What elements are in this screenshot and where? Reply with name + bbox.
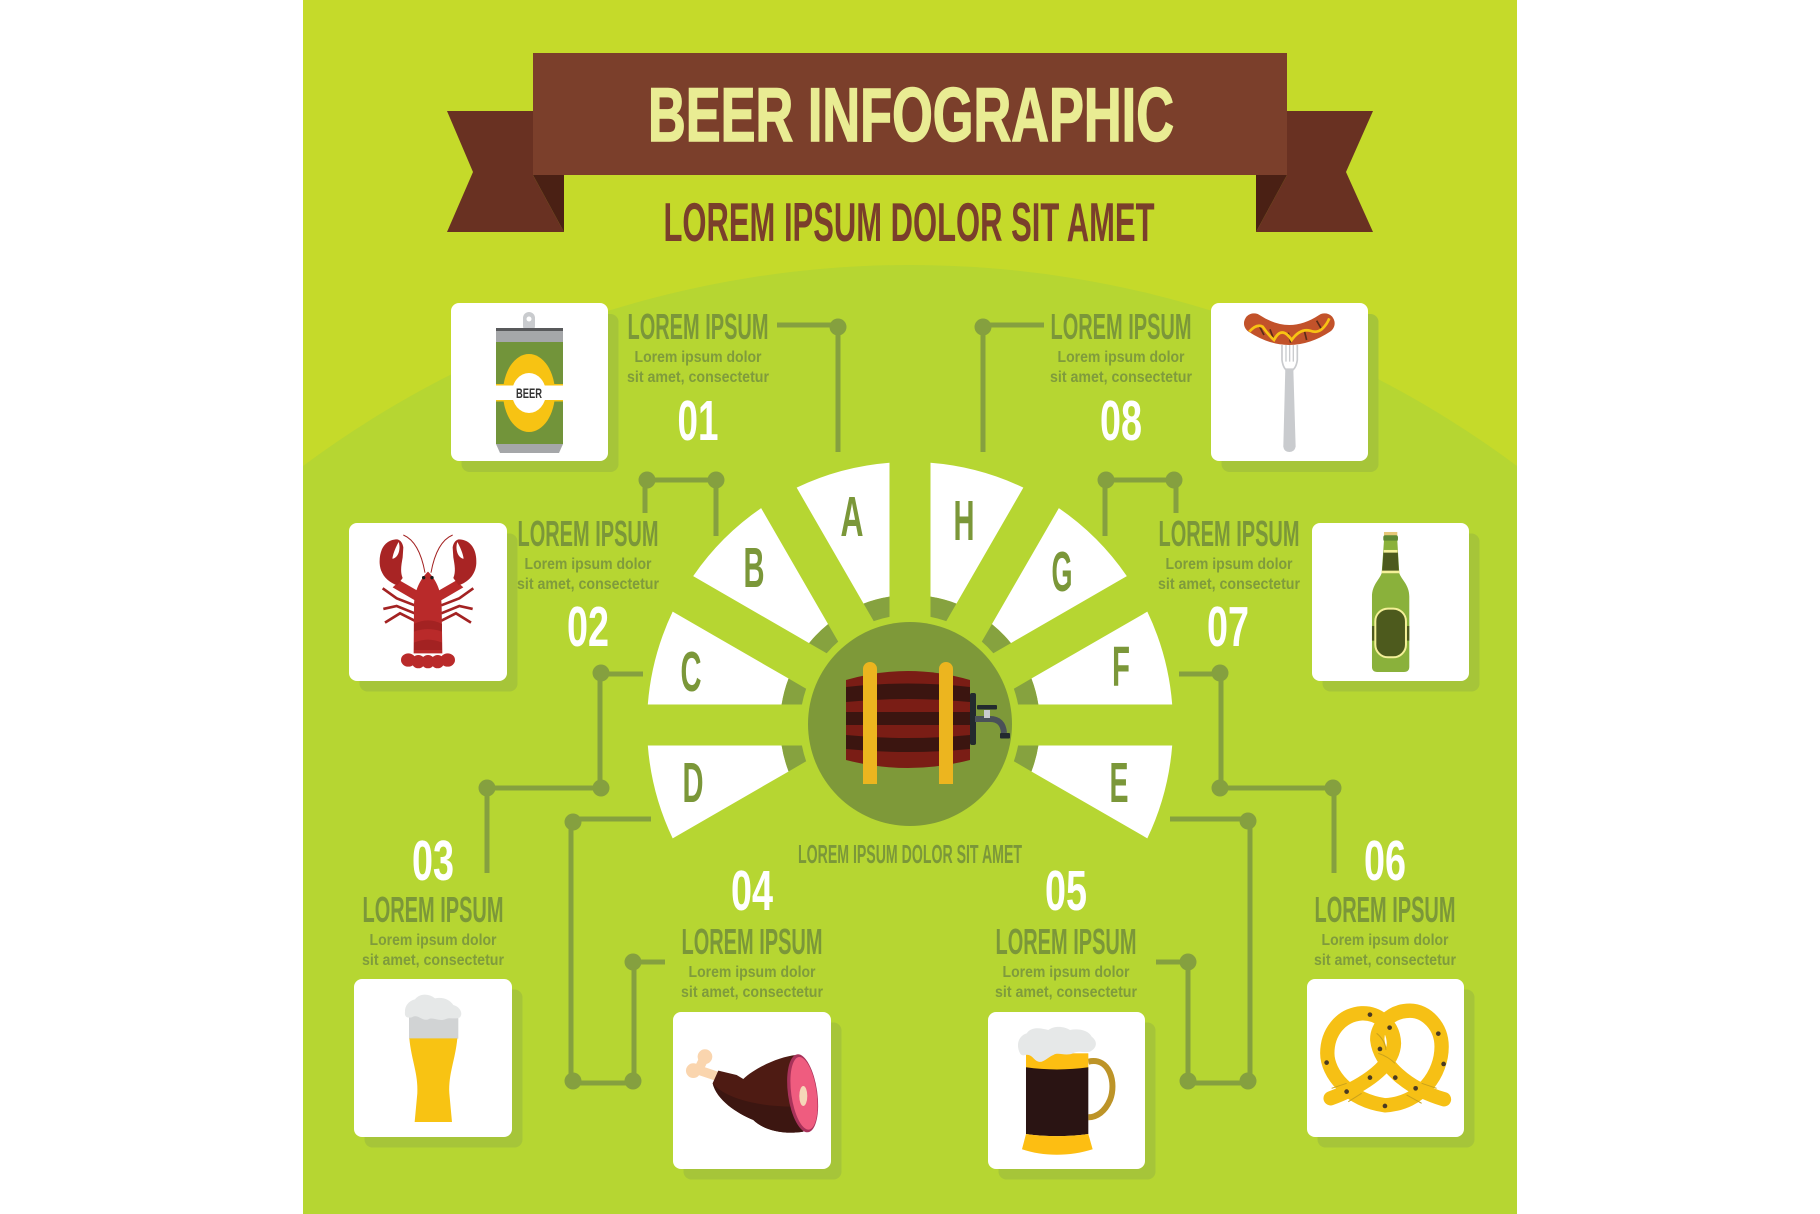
panel: item 07: LOREM IPSUM xyxy=(1158,513,1300,554)
icon: sausage on fork xyxy=(1249,318,1329,452)
fan chart: wedges A to H xyxy=(644,459,1176,839)
panel: item 08: 08 xyxy=(1100,389,1142,453)
fan chart: wedges A to H: H xyxy=(954,489,974,553)
panel: item 08: sit amet, consectetur xyxy=(1050,369,1192,386)
caption under hub: LOREM IPSUM DOLOR SIT AMET xyxy=(798,839,1022,869)
panel: item 07: Lorem ipsum dolor xyxy=(1166,556,1292,573)
panel: item 02: 02 xyxy=(567,595,609,659)
panel: item 06 xyxy=(1179,664,1474,1148)
panel: item 05: Lorem ipsum dolor xyxy=(1002,964,1130,981)
fan chart: wedges A to H: C xyxy=(680,640,702,704)
panel: item 05: LOREM IPSUM xyxy=(996,921,1136,962)
panel: item 04 xyxy=(564,814,842,1180)
panel: item 01: LOREM IPSUM xyxy=(628,306,768,347)
panel: item 05: 05 xyxy=(1045,859,1087,923)
panel: item 01: Lorem ipsum dolor xyxy=(634,349,762,366)
icon: pretzel xyxy=(1324,1011,1446,1108)
panel: item 07: sit amet, consectetur xyxy=(1158,576,1300,593)
fan chart: wedges A to H: B xyxy=(744,536,764,600)
panel: item 03: LOREM IPSUM xyxy=(362,889,504,930)
panel: item 07: 07 xyxy=(1207,595,1249,659)
icon: lobster xyxy=(380,535,476,668)
icon: ham xyxy=(686,1049,823,1134)
subtitle: LOREM IPSUM DOLOR SIT AMET xyxy=(664,191,1154,253)
center hub: barrel xyxy=(808,622,1012,826)
panel: item 02: Lorem ipsum dolor xyxy=(524,556,652,573)
panel: item 01 xyxy=(451,303,846,472)
title: BEER INFOGRAPHIC xyxy=(648,73,1174,158)
fan chart: wedges A to H: D xyxy=(682,751,704,815)
panel: item 04: 04 xyxy=(731,859,773,923)
panel: item 03 xyxy=(354,664,643,1148)
panel: item 08 xyxy=(974,303,1378,472)
icon: beer mug xyxy=(1018,1027,1112,1155)
panel: item 04: LOREM IPSUM xyxy=(682,921,822,962)
panel: item 03: Lorem ipsum dolor xyxy=(370,932,496,949)
icon: beer can xyxy=(496,312,563,453)
panel: item 02 xyxy=(349,472,724,692)
panel: item 08: LOREM IPSUM xyxy=(1050,306,1192,347)
panel: item 01: sit amet, consectetur xyxy=(627,369,769,386)
panel: item 03: 03 xyxy=(412,829,454,893)
panel: item 01: 01 xyxy=(678,389,718,453)
panel: item 07 xyxy=(1098,472,1480,692)
panel: item 06: sit amet, consectetur xyxy=(1314,952,1456,969)
fan chart: wedges A to H: G xyxy=(1052,540,1072,604)
fan chart: wedges A to H: E xyxy=(1110,751,1128,815)
panel: item 03: sit amet, consectetur xyxy=(362,952,504,969)
title ribbon xyxy=(447,53,1373,232)
panel: item 08: Lorem ipsum dolor xyxy=(1058,349,1184,366)
panel: item 06: Lorem ipsum dolor xyxy=(1322,932,1448,949)
fan chart: wedges A to H: F xyxy=(1112,635,1130,699)
panel: item 04: Lorem ipsum dolor xyxy=(688,964,816,981)
panel: item 02: LOREM IPSUM xyxy=(518,513,658,554)
icon: beer bottle xyxy=(1372,532,1409,672)
panel: item 04: sit amet, consectetur xyxy=(681,984,823,1001)
icon: wheat beer glass xyxy=(405,995,461,1122)
panel: item 06: 06 xyxy=(1364,829,1406,893)
icon: beer can: BEER xyxy=(516,385,542,401)
fan chart: wedges A to H: A xyxy=(840,485,864,549)
panel: item 05: sit amet, consectetur xyxy=(995,984,1137,1001)
panel: item 06: LOREM IPSUM xyxy=(1314,889,1456,930)
background panel xyxy=(303,0,1517,1214)
panel: item 02: sit amet, consectetur xyxy=(517,576,659,593)
panel: item 05 xyxy=(988,812,1256,1180)
